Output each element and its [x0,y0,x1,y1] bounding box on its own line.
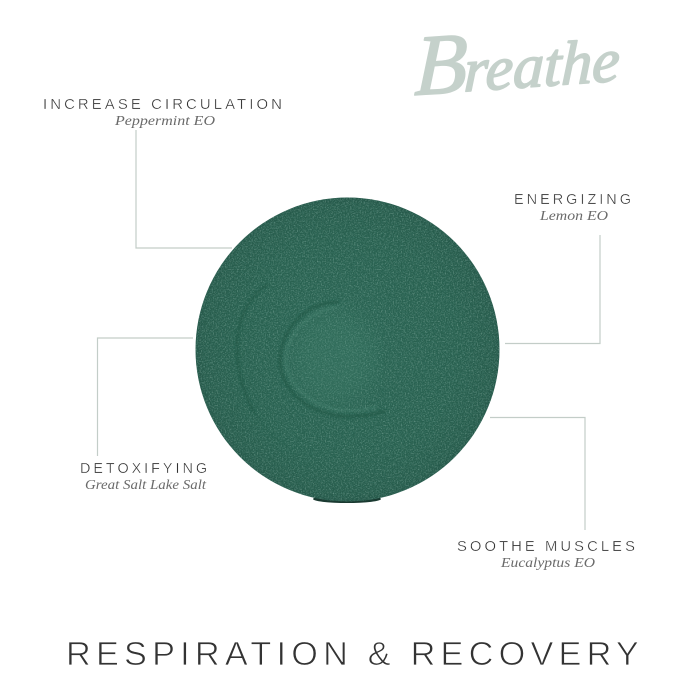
footer title: RESPIRATION & RECOVERY [66,635,644,672]
label ingredient: Great Salt Lake Salt [85,477,207,492]
image: green bath bomb [195,197,500,503]
label heading: SOOTHE MUSCLES [457,539,638,555]
bath bomb texture [195,197,500,502]
connector: detoxifying [98,338,193,456]
connector: increase circulation [136,130,232,248]
label: detoxifying [80,461,210,492]
label ingredient: Eucalyptus EO [500,555,595,570]
label heading: DETOXIFYING [80,461,210,477]
bath bomb flat base shadow [313,495,381,503]
label heading: ENERGIZING [514,192,634,208]
bath bomb sphere [196,198,500,502]
label heading: INCREASE CIRCULATION [43,97,285,113]
connector: soothe muscles [490,418,585,530]
embossed C logo [237,284,385,450]
script heading: Breathe: Breathe [413,3,622,114]
label ingredient: Peppermint EO [114,113,215,128]
label: increase circulation [43,97,285,128]
connector: energizing [505,235,600,344]
label: soothe muscles [457,539,638,570]
label ingredient: Lemon EO [539,208,608,223]
label: energizing [514,192,634,223]
